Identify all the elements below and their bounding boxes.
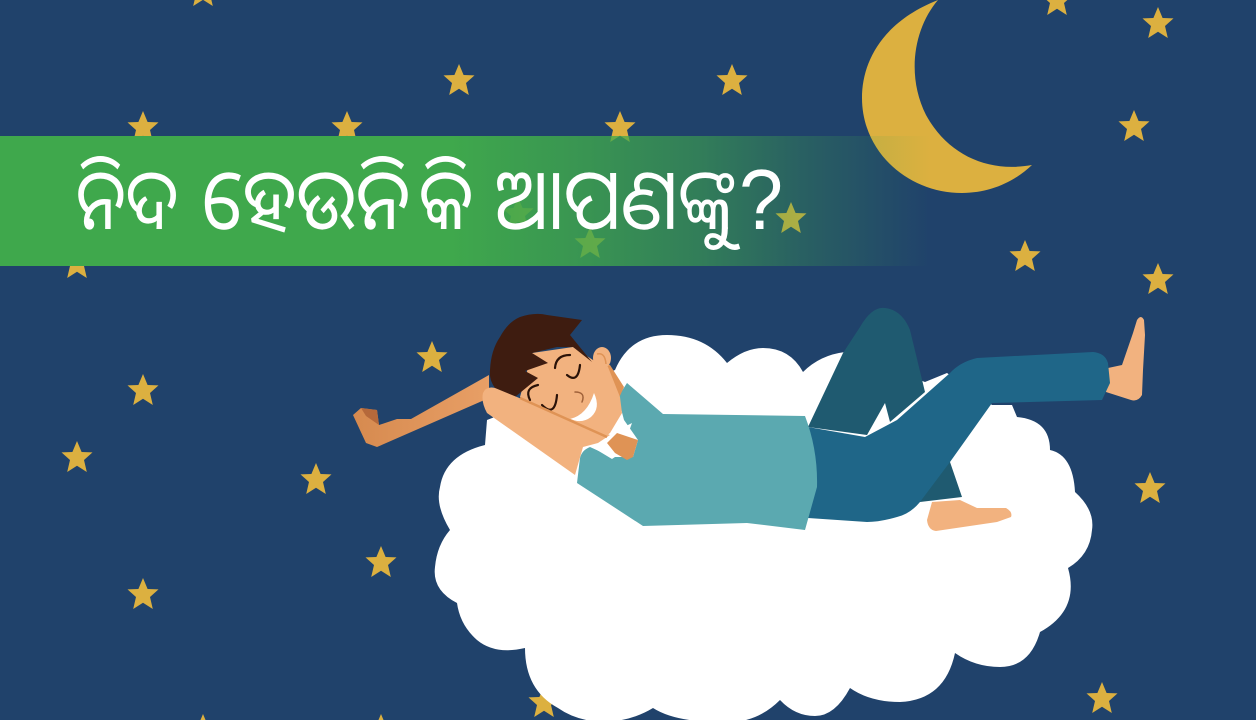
title: ହେଉନି (202, 153, 410, 248)
ear (593, 347, 611, 369)
white collar (592, 423, 632, 459)
far leg (808, 308, 962, 502)
crescent moon (862, 0, 1032, 193)
title: କି (419, 152, 473, 247)
head (520, 347, 622, 442)
back arm (353, 375, 489, 447)
far foot (927, 500, 1011, 531)
face details (528, 355, 583, 410)
sleeping man (353, 308, 1145, 531)
title: ? (739, 153, 783, 248)
hair (490, 314, 592, 397)
title (76, 152, 783, 251)
smile (570, 393, 597, 421)
cloud (435, 335, 1092, 720)
title: ଆପଣଙ୍କୁ (495, 154, 741, 251)
near foot (1106, 317, 1145, 400)
back hand (361, 408, 379, 425)
title: ନିଦ (76, 154, 178, 248)
near leg (808, 352, 1110, 522)
neck (600, 363, 638, 460)
green title band (0, 136, 930, 266)
near arm (482, 388, 610, 475)
shirt (577, 383, 817, 530)
